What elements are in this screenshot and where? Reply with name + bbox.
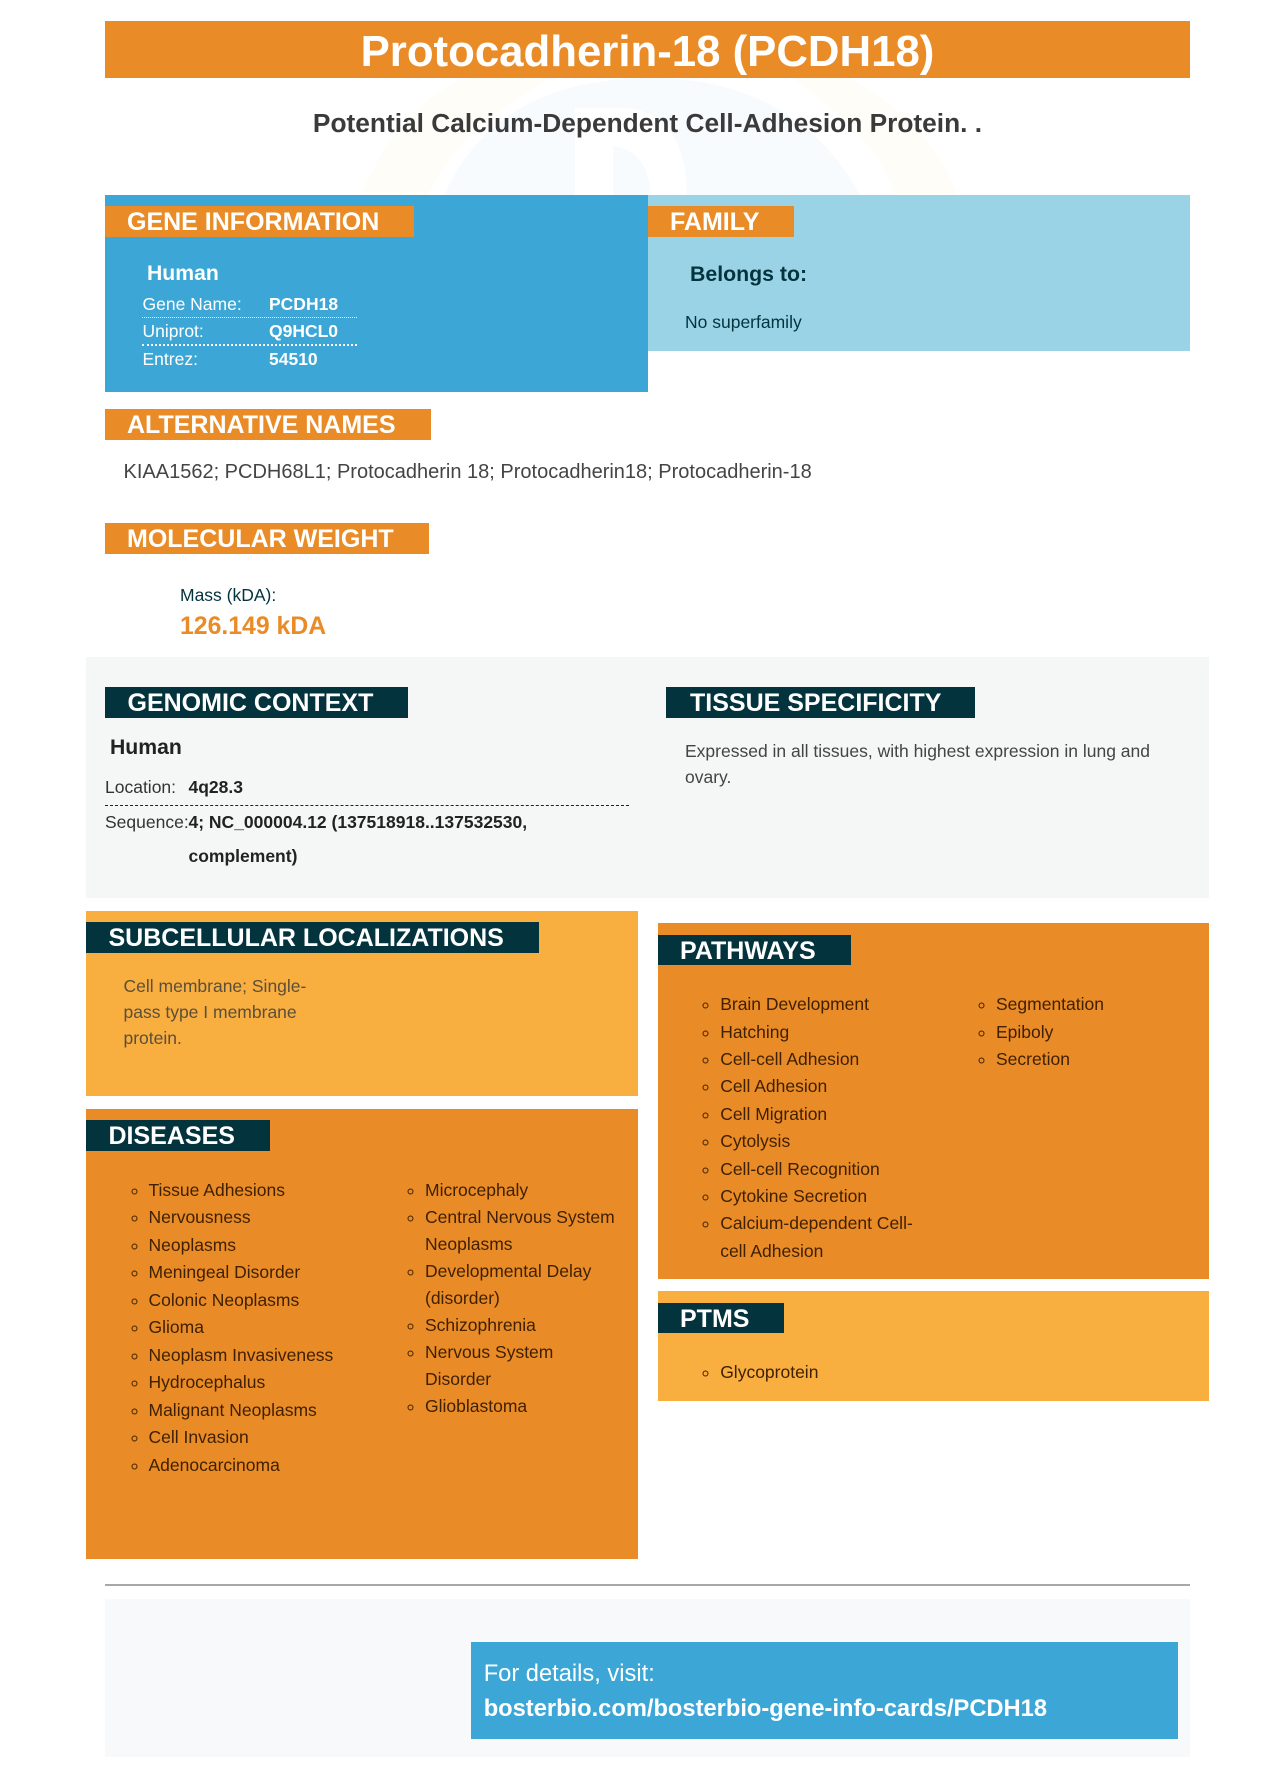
gene name row: Gene Name: [142,294,242,314]
mass value: 126.149 kDA [180,613,326,640]
disease list column 1: Hydrocephalus [148,1372,265,1392]
heading: family: FAMILY [670,208,759,236]
heading: gene information: GENE INFORMATION [127,208,379,236]
heading: diseases: DISEASES [108,1122,235,1150]
uniprot value: Q9HCL0 [269,321,338,341]
pathway list column 2: Secretion [996,1049,1070,1069]
panel: family [648,195,1190,351]
disease list column 2: Nervous System [425,1342,553,1362]
heading: subcellular localizations: SUBCELLULAR LOCALIZATIONS [108,924,504,952]
pathway list column 2: Segmentation [996,994,1104,1014]
panel: subcellular localizations [86,911,638,1096]
disease list column 1: Neoplasms [148,1235,236,1255]
pathway list column 2 [978,994,1104,1069]
disease list column 1: Glioma [148,1317,204,1337]
pathway list column 1: Cell-cell Adhesion [720,1049,859,1069]
tissue specificity text: ovary. [685,767,731,787]
disease list column 1 [132,1180,333,1475]
subcellular text: Cell membrane; Single- [124,976,306,996]
uniprot row: Uniprot: [142,321,204,341]
subcellular text [124,976,306,1048]
gene name value: PCDH18 [269,294,338,314]
entrez value: 54510 [269,349,318,369]
disease list column 2: Disorder [425,1369,491,1389]
pathway list column 1: Brain Development [720,994,869,1014]
callout url: bosterbio.com/bosterbio-gene-info-cards/PCDH18 [484,1696,1047,1722]
disease list column 1: Tissue Adhesions [148,1180,285,1200]
sequence value continued: complement) [188,846,297,866]
disease list column 1: Nervousness [148,1207,251,1227]
title banner: Protocadherin-18 (PCDH18) [361,27,934,76]
heading: diseases [86,1120,270,1151]
pathway list column 1: Cell Adhesion [720,1076,827,1096]
disease list column 2 [408,1180,615,1416]
callout: details link [471,1642,1178,1739]
disease list column 1: Adenocarcinoma [148,1455,280,1475]
callout label: For details, visit: [484,1661,655,1687]
panel: ptms [658,1291,1209,1401]
title banner [105,21,1190,78]
panel: pathways [658,923,1209,1279]
family value: No superfamily [685,312,802,332]
pathway list column 1: cell Adhesion [720,1241,823,1261]
pathway list column 1 [702,994,913,1261]
subcellular text: pass type I membrane [124,1002,297,1022]
subcellular text: protein. [124,1028,182,1048]
pathway list column 1: Cell-cell Recognition [720,1159,880,1179]
disease list column 2: Developmental Delay [425,1261,591,1281]
heading: ptms [658,1303,784,1333]
heading: tissue specificity: TISSUE SPECIFICITY [690,689,941,717]
pathway list column 1: Cytokine Secretion [720,1186,867,1206]
panel: gene information [105,195,648,392]
pathway list column 2: Epiboly [996,1022,1053,1042]
belongs to label: Belongs to: [690,262,807,286]
sequence label: Sequence: [105,812,189,832]
disease list column 2: Neoplasms [425,1234,513,1254]
panel: genomic context and tissue specificity [86,657,1209,898]
heading: pathways: PATHWAYS [680,937,816,965]
disease list column 2: Central Nervous System [425,1207,615,1227]
alternative names text: KIAA1562; PCDH68L1; Protocadherin 18; Protocadherin18; Protocadherin-18 [124,461,812,483]
entrez row: Entrez: [142,349,198,369]
disease list column 2: Schizophrenia [425,1315,536,1335]
disease list column 1: Cell Invasion [148,1427,249,1447]
subtitle: Potential Calcium-Dependent Cell-Adhesion Protein. . [313,108,982,138]
sequence value: 4; NC_000004.12 (137518918..137532530, [188,812,527,832]
heading: genomic context: GENOMIC CONTEXT [128,689,373,717]
tissue specificity text: Expressed in all tissues, with highest expression in lung and [685,741,1150,761]
disease list column 1: Meningeal Disorder [148,1262,300,1282]
species label: Human [110,736,182,759]
heading: pathways [658,935,850,965]
disease list column 1: Malignant Neoplasms [148,1400,317,1420]
heading: alternative names: ALTERNATIVE NAMES [127,411,396,439]
ptm list: Glycoprotein [720,1362,818,1382]
disease list column 2: (disorder) [425,1288,500,1308]
location value: 4q28.3 [188,777,243,797]
pathway list column 1: Calcium-dependent Cell- [720,1213,913,1233]
disease list column 2: Microcephaly [425,1180,528,1200]
disease list column 1: Colonic Neoplasms [148,1290,299,1310]
pathway list column 1: Cell Migration [720,1104,827,1124]
panel: diseases [86,1109,638,1559]
pathway list column 1: Cytolysis [720,1131,790,1151]
heading: family [648,206,794,237]
disease list column 1: Neoplasm Invasiveness [148,1345,333,1365]
heading: ptms: PTMS [680,1305,749,1333]
location label: Location: [105,777,176,797]
watermark logo [340,78,980,195]
species label: Human [147,262,219,285]
pathway list column 1: Hatching [720,1022,789,1042]
tissue specificity text [685,741,1150,787]
panel: footer [105,1599,1190,1757]
heading: molecular weight: MOLECULAR WEIGHT [127,525,394,553]
disease list column 2: Glioblastoma [425,1396,527,1416]
mass label: Mass (kDA): [180,585,276,605]
